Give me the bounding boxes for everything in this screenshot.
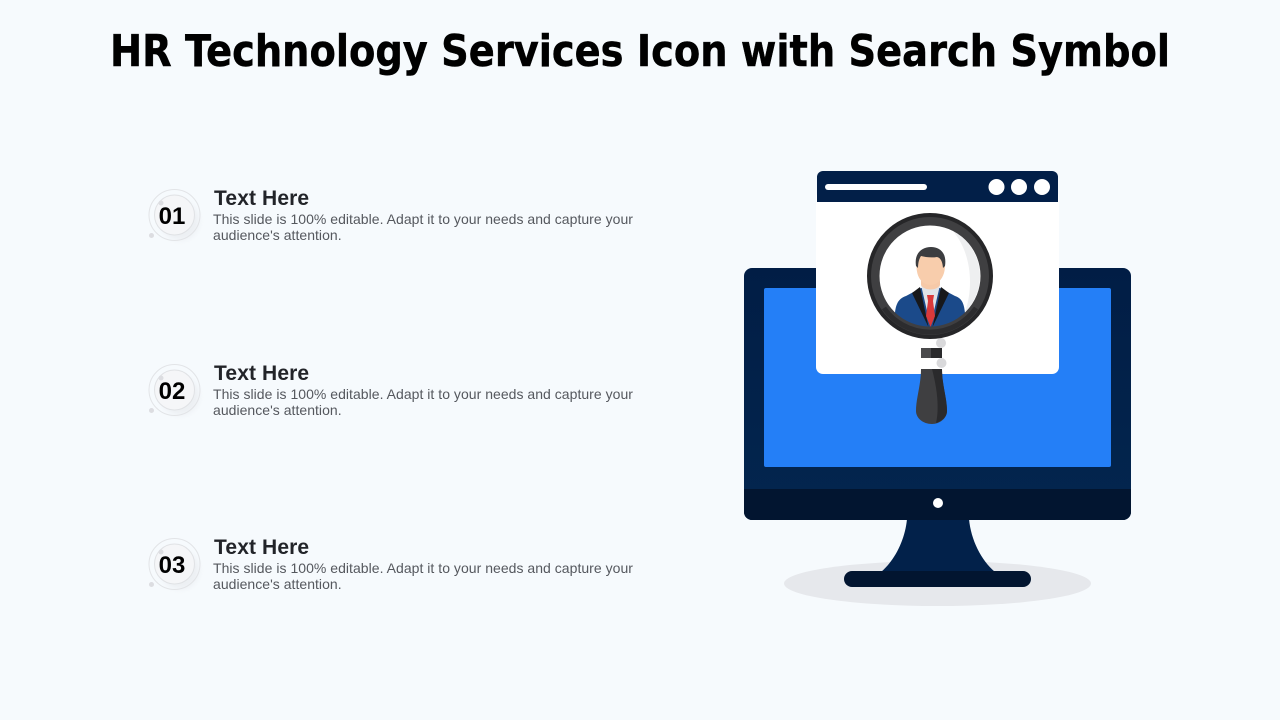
number badge 02 — [149, 364, 200, 416]
monitor base — [844, 571, 1031, 587]
neck — [921, 280, 940, 290]
number badge 01 — [149, 190, 200, 240]
handle connector — [936, 338, 946, 348]
description 02: audience's attention. — [213, 402, 342, 418]
magnifying glass — [869, 215, 991, 424]
address bar — [825, 184, 927, 190]
shirt — [921, 285, 940, 310]
power button — [933, 498, 943, 508]
illustration: monitor with search window — [744, 171, 1131, 606]
number badge 02: 02 — [159, 378, 185, 405]
description 01: audience's attention. — [213, 227, 342, 243]
suit — [895, 288, 965, 326]
monitor screen — [764, 288, 1111, 467]
list item 01 — [149, 187, 633, 243]
description 03: This slide is 100% editable. Adapt it to your needs and capture your — [213, 560, 633, 576]
description 02: This slide is 100% editable. Adapt it to your needs and capture your — [213, 386, 633, 402]
browser window — [816, 171, 1059, 374]
monitor chin — [744, 489, 1131, 520]
tie — [926, 295, 935, 327]
face — [916, 256, 945, 280]
hair — [916, 247, 945, 268]
heading 02: Text Here — [214, 362, 309, 385]
handle — [916, 369, 947, 424]
number badge 03 — [149, 538, 200, 590]
monitor shadow — [784, 561, 1091, 606]
lens ring — [874, 220, 986, 332]
number badge 03: 03 — [159, 552, 185, 579]
person — [895, 232, 980, 326]
monitor stand — [881, 519, 995, 572]
window dots — [988, 179, 1050, 195]
number badge 01: 01 — [159, 203, 185, 230]
monitor body — [744, 268, 1131, 520]
lens glare — [953, 231, 980, 312]
description 03: audience's attention. — [213, 576, 342, 592]
list item 03 — [149, 536, 633, 592]
lapels — [912, 287, 928, 327]
heading 03: Text Here — [214, 536, 309, 559]
list item 02 — [149, 362, 633, 418]
description 01: This slide is 100% editable. Adapt it to your needs and capture your — [213, 211, 633, 227]
heading 01: Text Here — [214, 187, 309, 210]
